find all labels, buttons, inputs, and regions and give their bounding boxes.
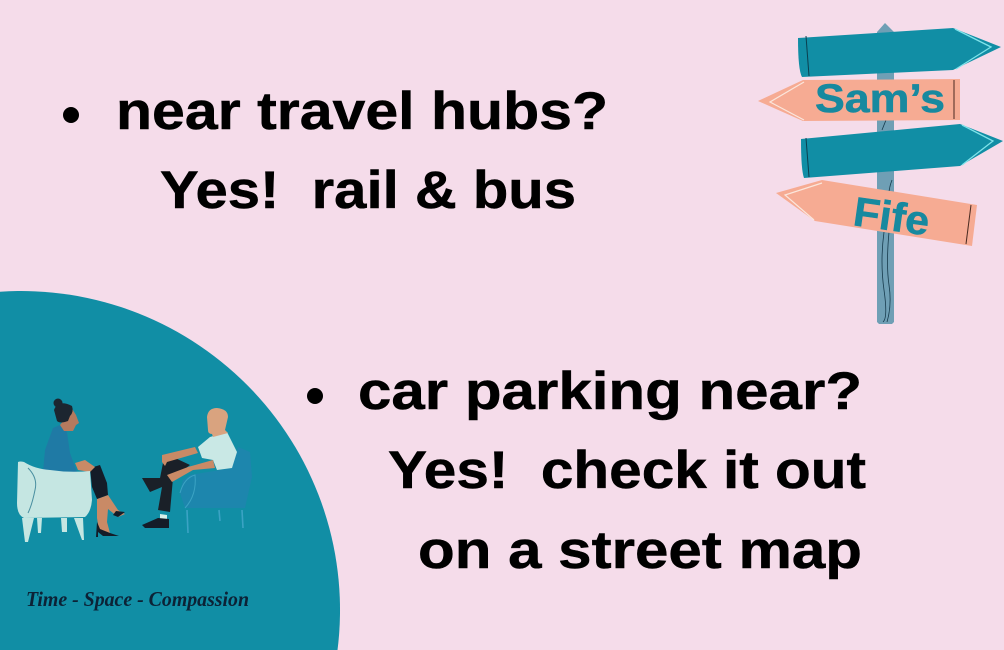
- bullet: near travel hubs: Yes! rail & bus: [160, 161, 576, 220]
- Sam's peach arrow: [758, 77, 960, 121]
- signpost pole: [877, 23, 894, 324]
- tagline: Time - Space - Compassion: [26, 587, 249, 611]
- Fife peach arrow: [776, 180, 977, 246]
- man legs and shoes: [142, 457, 190, 528]
- man torso: [198, 432, 237, 470]
- illustration: woman in armchair: [17, 398, 125, 542]
- bullet: near travel hubs: near travel hubs?: [116, 82, 608, 141]
- woman armchair: [17, 462, 92, 542]
- bullet: car parking near: Yes! check it out: [388, 441, 866, 500]
- icon: signpost: [758, 23, 1003, 324]
- third blank teal arrow: [801, 124, 1003, 178]
- Sam's peach arrow: Sam’s: [815, 77, 945, 121]
- woman blouse: [43, 425, 77, 472]
- woman head and hair: [54, 398, 79, 431]
- bullet: car parking near: on a street map: [418, 521, 862, 580]
- teal quarter circle panel: [0, 291, 340, 650]
- Fife peach arrow: Fife: [851, 188, 932, 244]
- man head: [207, 408, 228, 437]
- illustration: man in armchair: [142, 408, 252, 533]
- man arms: [162, 447, 215, 482]
- bullet: car parking near: car parking near?: [358, 362, 862, 421]
- man armchair: [180, 447, 252, 533]
- bullet: near travel hubs: [63, 82, 608, 220]
- top blank teal arrow: [798, 28, 1001, 77]
- woman legs and shoes: [75, 460, 125, 537]
- bullet: car parking near: [307, 362, 866, 580]
